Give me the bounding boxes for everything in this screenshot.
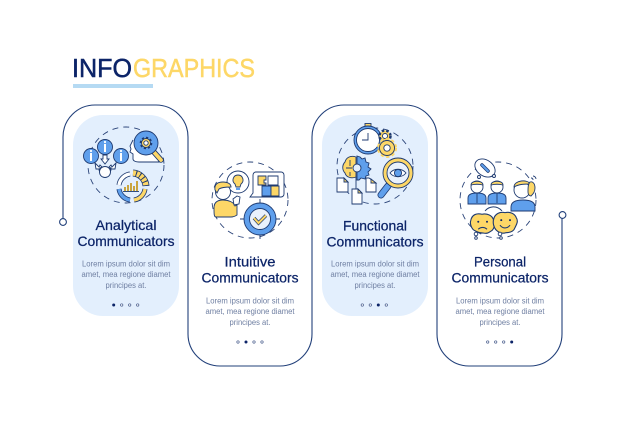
pager dots: step 2 — [237, 340, 263, 344]
title underline — [73, 84, 153, 88]
text: analytical: principes at. — [106, 281, 146, 290]
head profile — [130, 140, 159, 162]
thought bubble — [471, 155, 499, 181]
text: functional: amet, mea regione diamet — [330, 270, 420, 279]
icon: personal communicators — [460, 155, 536, 239]
text: personal — [456, 296, 545, 327]
listener with ear — [511, 176, 536, 211]
heading: intuitive — [202, 254, 298, 286]
pager dots: step 4 — [486, 340, 513, 344]
title — [72, 53, 255, 83]
blue panel: functional — [322, 115, 428, 316]
heading: analytical: Communicators — [78, 233, 174, 249]
text: intuitive: Lorem ipsum dolor sit dim — [206, 296, 294, 306]
target with check — [240, 199, 280, 239]
heading: functional — [326, 218, 424, 250]
magnifier with eye — [381, 158, 413, 195]
person middle — [488, 181, 506, 204]
heading: personal: Communicators — [452, 270, 548, 286]
heading: personal: Personal — [474, 254, 526, 270]
lightbulb bubble — [227, 171, 249, 193]
text: personal: amet, mea regione diamet — [456, 307, 545, 316]
text: intuitive: principes at. — [230, 318, 270, 327]
heading: functional: Functional — [343, 218, 407, 234]
title: GRAPHICS — [133, 53, 255, 83]
donut chart — [119, 173, 146, 200]
magnifier with gear — [134, 131, 161, 160]
icon: functional communicators — [337, 124, 413, 204]
text: intuitive — [206, 296, 295, 327]
pager dots: step 1 — [112, 304, 139, 306]
text: analytical: amet, mea regione diamet — [82, 270, 171, 279]
title: INFO — [72, 53, 132, 83]
text: personal: principes at. — [480, 318, 520, 327]
text: analytical: Lorem ipsum dolor sit dim — [82, 260, 170, 268]
connecting outline — [60, 105, 566, 366]
blue panel: analytical — [73, 115, 179, 316]
heading: personal — [452, 254, 548, 286]
pager dots: step 3 — [361, 304, 387, 306]
icon: analytical communicators — [84, 127, 164, 203]
info circles — [84, 140, 128, 178]
person — [214, 182, 240, 217]
sad and happy blobs — [470, 207, 517, 239]
heading: intuitive: Intuitive — [224, 254, 276, 270]
gears — [378, 130, 396, 156]
icon: intuitive communicators — [212, 162, 288, 239]
heading: functional: Communicators — [326, 234, 424, 250]
brain and gear head — [343, 156, 371, 190]
text: personal: Lorem ipsum dolor sit dim — [456, 296, 544, 306]
text: functional — [330, 260, 420, 290]
person left — [468, 181, 486, 204]
heading: intuitive: Communicators — [202, 270, 298, 286]
heading: analytical: Analytical — [96, 217, 156, 233]
text: analytical — [82, 260, 171, 290]
documents — [337, 178, 376, 204]
text: intuitive: amet, mea regione diamet — [206, 307, 295, 316]
clock — [354, 124, 382, 154]
text: functional: principes at. — [354, 281, 396, 290]
heading: analytical — [78, 217, 174, 249]
text: functional: Lorem ipsum dolor sit dim — [331, 260, 419, 268]
puzzle speech bubble — [250, 172, 284, 197]
